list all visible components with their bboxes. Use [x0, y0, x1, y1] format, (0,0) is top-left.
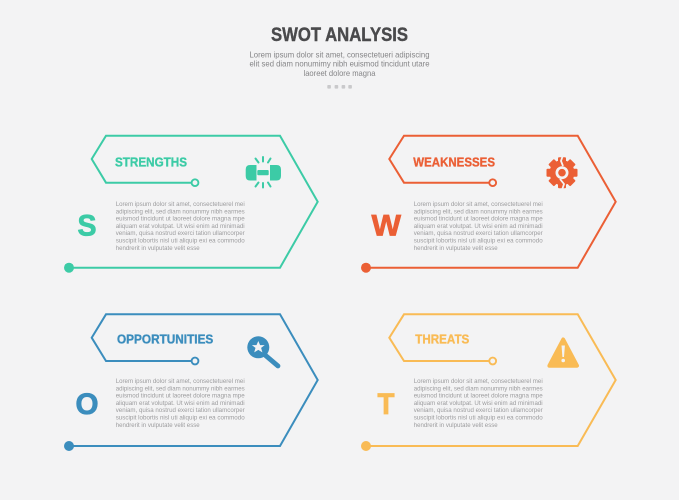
strengths body text: adipiscing elit, sed diam nonummy nibh earmes	[116, 208, 245, 215]
subtitle text block	[250, 50, 430, 78]
strengths body text: euismod tincidunt ut laoreet dolore magna mpe	[116, 216, 245, 223]
weaknesses body text: Lorem ipsum dolor sit amet, consectetuerel mei	[414, 201, 543, 208]
weaknesses outline	[366, 136, 616, 268]
threats body text: aliquam erat volutpat. Ut wisi enim ad minimadi	[414, 400, 543, 407]
opportunities body text: adipiscing elit, sed diam nonummy nibh earmes	[116, 385, 245, 392]
opportunities body text: suscipit lobortis nisl uti aliquip exi ea commodo	[116, 414, 245, 422]
weaknesses body text: euismod tincidunt ut laoreet dolore magna mpe	[414, 216, 543, 223]
panel: strengths	[64, 136, 318, 273]
strengths end ring	[192, 179, 198, 186]
subtitle text block: elit sed diam nonumimy nibh euismod tincidunt utare	[250, 60, 430, 69]
strengths outline	[69, 136, 318, 268]
panel: weaknesses	[361, 136, 616, 273]
threats body text: hendrerit in vulputate velit esse	[414, 422, 498, 429]
weaknesses letter: W	[372, 210, 402, 243]
weaknesses heading: WEAKNESSES	[413, 155, 495, 170]
icon: broken gear	[546, 155, 578, 190]
strengths start dot	[64, 263, 74, 273]
opportunities letter: O	[76, 388, 98, 421]
icon: warning triangle	[549, 340, 577, 366]
weaknesses body text: veniam, quisa nostrud exerci tation ullamcorper	[414, 230, 543, 237]
opportunities body text: veniam, quisa nostrud exerci tation ullamcorper	[116, 407, 245, 414]
strengths body text: hendrerit in vulputate velit esse	[116, 245, 200, 252]
threats heading: THREATS	[415, 332, 470, 347]
weaknesses body text	[414, 201, 543, 252]
opportunities body text: Lorem ipsum dolor sit amet, consectetuerel mei	[116, 378, 245, 385]
panel: threats	[361, 314, 616, 451]
strengths body text: Lorem ipsum dolor sit amet, consectetuerel mei	[116, 201, 245, 208]
subtitle text block: laoreet dolore magna	[304, 69, 376, 78]
strengths body text	[116, 201, 245, 252]
threats body text: suscipit lobortis nisl uti aliquip exi ea commodo	[414, 414, 543, 422]
weaknesses body text: aliquam erat volutpat. Ut wisi enim ad minimadi	[414, 223, 543, 230]
pagination dots	[327, 85, 352, 89]
opportunities body text	[116, 378, 245, 429]
threats body text: Lorem ipsum dolor sit amet, consectetuerel mei	[414, 378, 543, 385]
threats body text: euismod tincidunt ut laoreet dolore magna mpe	[414, 393, 543, 400]
threats end ring	[489, 358, 496, 364]
threats body text: veniam, quisa nostrud exerci tation ullamcorper	[414, 407, 543, 414]
opportunities body text: aliquam erat volutpat. Ut wisi enim ad minimadi	[116, 400, 245, 407]
weaknesses body text: suscipit lobortis nisl uti aliquip exi ea commodo	[414, 238, 543, 244]
strengths heading: STRENGTHS	[115, 155, 187, 170]
opportunities body text: euismod tincidunt ut laoreet dolore magna mpe	[116, 393, 245, 400]
weaknesses end ring	[489, 179, 496, 186]
threats letter: T	[378, 388, 394, 421]
weaknesses body text: adipiscing elit, sed diam nonummy nibh earmes	[414, 208, 543, 215]
threats outline	[366, 314, 616, 446]
opportunities body text: hendrerit in vulputate velit esse	[116, 422, 200, 429]
opportunities end ring	[192, 358, 198, 364]
strengths letter: S	[78, 210, 96, 243]
subtitle text block: Lorem ipsum dolor sit amet, consectetueri adipiscing	[250, 50, 430, 60]
threats body text	[414, 378, 543, 429]
strengths body text: aliquam erat volutpat. Ut wisi enim ad minimadi	[116, 223, 245, 230]
opportunities outline	[69, 314, 318, 446]
strengths body text: veniam, quisa nostrud exerci tation ullamcorper	[116, 230, 245, 237]
icon: dumbbell	[246, 157, 281, 188]
opportunities heading: OPPORTUNITIES	[117, 332, 214, 347]
strengths body text: suscipit lobortis nisl uti aliquip exi ea commodo	[116, 238, 245, 244]
threats body text: adipiscing elit, sed diam nonummy nibh earmes	[414, 385, 543, 392]
weaknesses start dot	[361, 263, 371, 273]
icon: magnifier with star	[247, 336, 278, 366]
panel: opportunities	[64, 314, 318, 451]
weaknesses body text: hendrerit in vulputate velit esse	[414, 245, 498, 252]
threats start dot	[361, 441, 371, 451]
title: SWOT ANALYSIS	[271, 25, 408, 46]
opportunities start dot	[64, 441, 74, 451]
